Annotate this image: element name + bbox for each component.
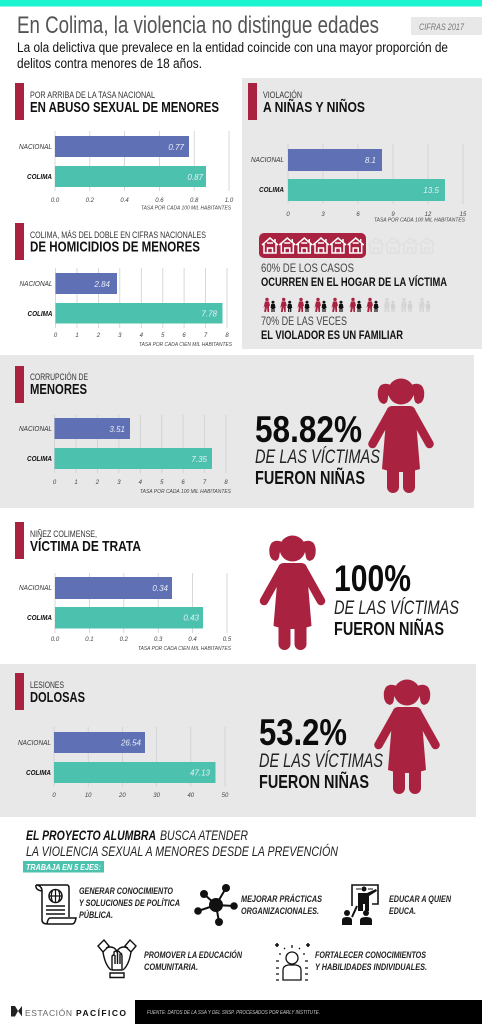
text: mejorar prácticas: ORGANIZACIONALES.	[241, 906, 319, 917]
panel: abuso sexual	[15, 83, 234, 212]
stat: 53.2%: DE LAS VÍCTIMAS	[259, 751, 383, 772]
heading: violación	[248, 83, 365, 120]
bar chart: corrupción: 7.35	[191, 455, 208, 464]
text: generar conocimiento: GENERAR CONOCIMIENTO	[79, 886, 173, 897]
panel: corrupción de menores	[0, 355, 474, 508]
stat: 58.82%	[255, 409, 380, 488]
bar chart: homicidios: 0	[54, 333, 58, 339]
label: trabaja en 5 ejes: TRABAJA EN 5 EJES:	[26, 862, 101, 872]
bar chart: homicidios: 7	[204, 333, 208, 339]
bar chart: corrupción: 1	[74, 480, 78, 486]
bar chart: lesiones: 20	[118, 793, 126, 799]
bar chart: violación: NACIONAL	[251, 155, 284, 164]
stat: 53.2%	[259, 712, 383, 792]
bar chart: homicidios: 5	[161, 333, 165, 339]
text: educar a quien: EDUCA.	[389, 906, 416, 917]
text: promover: PROMOVER LA EDUCACIÓN	[144, 949, 243, 961]
text: generar conocimiento: Y SOLUCIONES DE POLÍTICA	[79, 898, 180, 909]
heading: corrupción: CORRUPCIÓN DE	[30, 372, 88, 382]
bar chart: lesiones: 50	[222, 793, 229, 799]
bar chart: trata: 0.4	[188, 637, 197, 643]
bar chart: homicidios: 8	[225, 333, 229, 339]
heading: trata: NIÑEZ COLIMENSE,	[30, 529, 97, 539]
bar chart: abuso sexual: TASA POR CADA 100 MIL HABITANTES	[141, 206, 231, 212]
project heading: EL PROYECTO ALUMBRA	[26, 828, 156, 843]
bar chart: homicidios: 1	[75, 333, 79, 339]
project heading	[26, 828, 338, 859]
bar chart: abuso sexual	[19, 131, 234, 212]
bar chart: abuso sexual: 0.2	[86, 198, 95, 204]
title: En Colima, la violencia no distingue edades	[17, 12, 379, 39]
heading: abuso sexual: POR ARRIBA DE LA TASA NACIONAL	[30, 90, 155, 100]
bar chart: lesiones: 47.13	[190, 768, 211, 778]
logo: Estación Pacífico: ESTACIÓN	[25, 1008, 72, 1018]
bar chart: violación: 6	[356, 212, 360, 218]
text: fortalecer: FORTALECER CONOCIMIENTOS	[315, 950, 426, 961]
bar chart: homicidios: COLIMA	[28, 309, 52, 318]
icon: girl	[264, 536, 321, 650]
icon: girl	[372, 378, 430, 493]
stat: 58.82%: 58.82%	[255, 409, 362, 450]
panel: violación	[242, 78, 482, 349]
stat: hogar: 60% DE LOS CASOS	[261, 263, 354, 275]
heading: lesiones: DOLOSAS	[30, 689, 85, 706]
bar chart: abuso sexual: COLIMA	[27, 172, 52, 181]
heading: violación: A NIÑAS Y NIÑOS	[263, 98, 365, 116]
bar chart: trata: TASA POR CADA CIEN MIL HABITANTES	[138, 646, 231, 652]
panel: homicidios	[15, 223, 232, 348]
footer source bar: FUENTE: DATOS DE LA SSA Y DEL SNSP. PROCESADOS POR EARLY INSTITUTE.	[147, 1010, 320, 1016]
bar chart: trata: 0.3	[154, 637, 163, 643]
bar chart: abuso sexual: NACIONAL	[19, 142, 52, 151]
bar chart: abuso sexual: 0.77	[168, 143, 185, 152]
text: generar conocimiento: PÚBLICA.	[79, 909, 113, 921]
logo: Estación Pacífico	[11, 1006, 126, 1018]
stat: familiar: 70% DE LAS VECES	[261, 316, 347, 328]
bar chart: corrupción: 3.51	[109, 425, 125, 434]
heading: trata: VÍCTIMA DE TRATA	[30, 538, 141, 555]
subtitle: delitos contra menores de 18 años.	[17, 56, 202, 71]
bar chart: violación: TASA POR CADA 100 MIL HABITANTES	[374, 218, 465, 224]
bar chart: corrupción: 0	[53, 480, 57, 486]
heading: trata	[15, 522, 141, 559]
bar chart: abuso sexual: 0.87	[187, 173, 204, 182]
bar chart: lesiones: 40	[187, 793, 195, 799]
bar chart: violación: 15	[460, 212, 467, 218]
bar chart: homicidios: TASA POR CADA CIEN MIL HABITANTES	[139, 342, 232, 348]
bar chart: corrupción: COLIMA	[27, 454, 52, 463]
bar chart: violación	[251, 144, 467, 224]
bar chart: violación: 3	[321, 212, 325, 218]
icon: girl	[378, 680, 436, 794]
bar chart: violación: COLIMA	[259, 185, 284, 194]
bar chart: lesiones: 10	[85, 793, 92, 799]
bar chart: trata: 0.2	[120, 637, 129, 643]
subtitle	[17, 40, 448, 71]
bar chart: trata	[19, 573, 232, 652]
year tag	[411, 17, 482, 35]
bar chart: abuso sexual: 0.6	[155, 198, 164, 204]
text: mejorar prácticas	[241, 894, 323, 917]
bar chart: lesiones: 30	[153, 793, 161, 799]
bar chart: trata: 0.5	[223, 637, 232, 643]
stat: familiar: EL VIOLADOR ES UN FAMILIAR	[261, 328, 403, 342]
bar chart: homicidios	[20, 268, 232, 348]
heading: abuso sexual	[15, 83, 219, 120]
bar chart: corrupción	[19, 415, 231, 495]
bar chart: corrupción: NACIONAL	[19, 424, 52, 433]
heading: violación: VIOLACIÓN	[263, 90, 302, 100]
bar chart: corrupción: 5	[160, 480, 164, 486]
bar chart: lesiones: COLIMA	[26, 768, 51, 777]
heading: homicidios	[15, 223, 206, 260]
text: fortalecer	[315, 950, 427, 973]
bar chart: corrupción: 2	[95, 480, 100, 486]
bar chart: violación: 0	[286, 212, 290, 218]
bar chart: corrupción: 3	[117, 480, 121, 486]
heading: homicidios: COLIMA, MÁS DEL DOBLE EN CIFRAS NACIONALES	[30, 230, 206, 240]
bar chart: corrupción: TASA POR CADA 100 MIL HABITANTES	[140, 489, 231, 495]
stat: 100%: 100%	[334, 558, 411, 599]
panel: lesiones dolosas	[0, 664, 476, 817]
bar chart: homicidios: 6	[182, 333, 186, 339]
heading: corrupción: MENORES	[30, 381, 87, 398]
project heading: BUSCA ATENDER	[160, 828, 248, 843]
bar chart: abuso sexual: 0.0	[51, 198, 60, 204]
bar chart: homicidios: 3	[118, 333, 122, 339]
bar chart: abuso sexual: 0.4	[120, 198, 129, 204]
text: generar conocimiento	[79, 886, 180, 921]
bar chart: trata: 0.1	[85, 637, 94, 643]
bar chart: homicidios: 2.84	[93, 280, 111, 289]
text: promover	[144, 949, 243, 973]
stat: familiar	[261, 316, 403, 342]
bar chart: homicidios: NACIONAL	[20, 279, 52, 288]
bar chart: trata: NACIONAL	[19, 583, 52, 592]
panel: trata	[15, 522, 459, 652]
stat: 100%: FUERON NIÑAS	[334, 618, 444, 639]
bar chart: lesiones: 26.54	[120, 738, 142, 748]
text: educar a quien: EDUCAR A QUIEN	[389, 894, 452, 905]
footer source bar	[135, 1000, 482, 1024]
text: fortalecer: Y HABILIDADES INDIVIDUALES.	[315, 962, 427, 973]
bar chart: abuso sexual: 0.8	[190, 198, 199, 204]
bar chart: homicidios: 7.78	[201, 310, 218, 318]
icon row: people	[264, 298, 431, 312]
bar chart: trata: 0.43	[183, 614, 200, 622]
stat: 100%	[334, 558, 459, 639]
text: mejorar prácticas: MEJORAR PRÁCTICAS	[241, 894, 323, 905]
stat: 53.2%: FUERON NIÑAS	[259, 771, 369, 792]
project heading: LA VIOLENCIA SEXUAL A MENORES DESDE LA PREVENCIÓN	[26, 844, 338, 859]
heading: corrupción	[15, 366, 88, 403]
bar chart: violación: 9	[391, 212, 395, 218]
bar chart: corrupción: 4	[139, 480, 143, 486]
bar chart: violación: 8.1	[365, 156, 376, 165]
heading: lesiones	[15, 673, 85, 710]
text: educar a quien	[389, 894, 452, 917]
bar chart: violación: 13.5	[423, 186, 440, 195]
bar chart: trata: COLIMA	[27, 613, 52, 622]
bar chart: corrupción: 6	[181, 480, 185, 486]
bar chart: lesiones	[18, 727, 229, 799]
bar chart: lesiones: 0	[52, 793, 56, 799]
icon: teacher	[342, 885, 378, 925]
bar chart: trata: 0.34	[152, 584, 169, 593]
logo: Estación Pacífico: PACÍFICO	[76, 1008, 126, 1018]
stat: 58.82%: DE LAS VÍCTIMAS	[255, 447, 380, 468]
icon: network	[194, 884, 238, 926]
stat: 58.82%: FUERON NIÑAS	[255, 467, 365, 488]
icon: person with sparkles	[275, 943, 310, 980]
text: promover: COMUNITARIA.	[144, 962, 198, 973]
stat: 53.2%: 53.2%	[259, 712, 347, 753]
icon: joined hands	[98, 940, 136, 978]
top accent bar	[0, 0, 482, 6]
bar chart: trata: 0.0	[51, 637, 60, 643]
bar chart: violación: 12	[425, 212, 432, 218]
bar chart: homicidios: 4	[140, 333, 144, 339]
stat: hogar	[261, 263, 447, 289]
bar chart: lesiones: NACIONAL	[18, 738, 51, 747]
heading: homicidios: DE HOMICIDIOS DE MENORES	[30, 238, 200, 256]
year tag: CIFRAS 2017	[419, 22, 465, 32]
bar chart: corrupción: 8	[224, 480, 228, 486]
heading: lesiones: LESIONES	[30, 680, 64, 690]
heading: abuso sexual: EN ABUSO SEXUAL DE MENORES	[30, 99, 219, 116]
icon: document with globe	[36, 885, 76, 924]
icon row: houses	[259, 233, 435, 258]
bar chart: abuso sexual: 1.0	[225, 198, 234, 204]
bar chart: corrupción: 7	[203, 480, 207, 486]
bar chart: homicidios: 2	[96, 333, 101, 339]
